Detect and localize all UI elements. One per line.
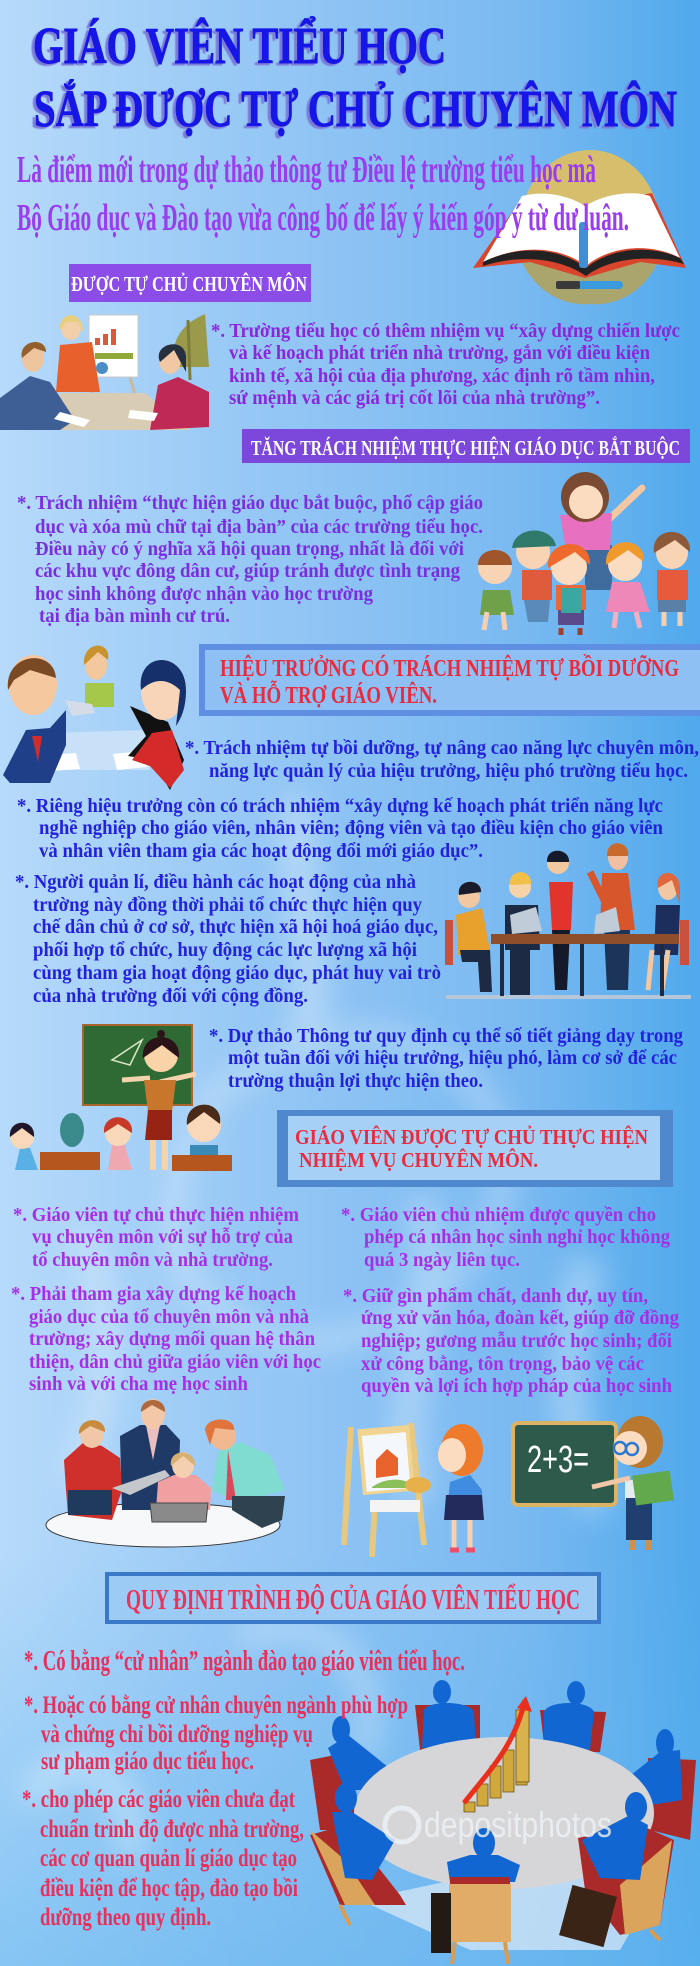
paragraph: thực hiện giáo dục bắt buộc: Điều này có ý nghĩa xã hội quan trọng, nhất là đối với (35, 538, 464, 560)
paragraph: xây dựng kế hoạch giáo dục: sinh và với cha mẹ học sinh (29, 1373, 248, 1395)
paragraph: giáo viên chủ nhiệm: phép cá nhân học sinh nghỉ học không (364, 1226, 670, 1248)
paragraph: nhiệm vụ chiến lược: và kế hoạch phát triển nhà trường, gắn với điều kiện (229, 342, 650, 364)
paragraph: điều kiện học tập: các cơ quan quản lí giáo dục tạo (40, 1845, 297, 1872)
heading: giáo viên được tự chủ: NHIỆM VỤ CHUYÊN MÔN. (299, 1148, 538, 1172)
paragraph: thực hiện giáo dục bắt buộc: các khu vực đông dân cư, giúp tránh được tình trạng (35, 560, 460, 582)
paragraph: người quản lí: chế dân chủ ở cơ sở, thực hiện xã hội hoá giáo dục, (33, 916, 438, 938)
paragraph: chứng chỉ bồi dưỡng (24, 1692, 408, 1775)
paragraph: giáo viên tự chủ: *. Giáo viên tự chủ thực hiện nhiệm (13, 1204, 299, 1226)
paragraph: kế hoạch phát triển năng lực: và nhân viên tham gia các hoạt động đổi mới giáo dục”. (39, 840, 483, 862)
paragraph: thực hiện giáo dục bắt buộc: dục và xóa mù chữ tại địa bàn” của các trường tiểu học. (35, 516, 483, 538)
title: GIÁO VIÊN TIỂU HỌC (33, 16, 446, 75)
paragraph: giáo viên tự chủ: tổ chuyên môn và nhà trường. (32, 1249, 273, 1271)
paragraph: số tiết giảng dạy: *. Dự thảo Thông tư quy định cụ thể số tiết giảng dạy trong (209, 1025, 683, 1047)
illustration: teacher with pupils (478, 472, 690, 635)
paragraph: kế hoạch phát triển năng lực (17, 795, 663, 862)
paragraph: xây dựng kế hoạch giáo dục: trường; xây dựng mối quan hệ thân (29, 1328, 315, 1350)
paragraph: xây dựng kế hoạch giáo dục: thiện, dân chủ giữa giáo viên với học (29, 1351, 321, 1373)
paragraph: người quản lí: trường này đồng thời phải tổ chức thực hiện quy (33, 894, 422, 916)
pupils (478, 530, 690, 635)
paragraph: điều kiện học tập: chuẩn trình độ được nhà trường, (40, 1816, 304, 1843)
heading: được tự chủ chuyên môn (69, 264, 311, 302)
illustration: cartoon managers (3, 646, 186, 790)
paragraph: người quản lí: *. Người quản lí, điều hành các hoạt động của nhà (15, 871, 416, 893)
paragraph: điều kiện học tập (22, 1786, 304, 1931)
paragraph: thực hiện giáo dục bắt buộc: học sinh không được nhận vào học trường (35, 583, 373, 605)
paragraph: giáo viên tự chủ (13, 1204, 299, 1271)
illustration: team at desk (445, 843, 691, 999)
watermark: depositphotos (424, 1804, 612, 1845)
paragraph: thực hiện giáo dục bắt buộc: *. Trách nhiệm “thực hiện giáo dục bắt buộc, phổ cập giáo (17, 492, 483, 514)
paragraph: kế hoạch phát triển năng lực: *. Riêng hiệu trưởng còn có trách nhiệm “xây dựng kế hoạch phát triển năng lực (17, 795, 663, 817)
paragraph: điều kiện học tập: *. cho phép các giáo viên chưa đạt (22, 1786, 296, 1813)
paragraph: điều kiện học tập: điều kiện để học tập, đào tạo bồi (40, 1875, 298, 1902)
illustration: teacher at chalkboard with children (10, 1025, 232, 1171)
illustration: office meeting (0, 314, 209, 430)
subtitle (17, 149, 629, 239)
paragraph: xây dựng kế hoạch giáo dục (11, 1283, 321, 1395)
paragraph: giữ gìn phẩm chất (343, 1285, 679, 1397)
bar chart with rising arrow (464, 1696, 532, 1812)
paragraph: giữ gìn phẩm chất: xử công bằng, tôn trọng, bảo vệ các (361, 1353, 644, 1375)
heading: quy định trình độ (107, 1574, 599, 1622)
illustration: round table business meeting (310, 1680, 696, 1964)
heading: giáo viên được tự chủ (277, 1110, 673, 1187)
paragraph: tự bồi dưỡng (185, 737, 699, 782)
heading: hiệu trưởng: VÀ HỖ TRỢ GIÁO VIÊN. (220, 681, 437, 709)
icon: open book (473, 150, 686, 304)
heading: được tự chủ chuyên môn: ĐƯỢC TỰ CHỦ CHUYÊN MÔN (71, 272, 307, 296)
paragraph: điều kiện học tập: dưỡng theo quy định. (40, 1904, 211, 1931)
paragraph: số tiết giảng dạy: một tuần đối với hiệu trưởng, hiệu phó, làm cơ sở để các (228, 1047, 677, 1069)
heading: giáo viên được tự chủ: GIÁO VIÊN ĐƯỢC TỰ CHỦ THỰC HIỆN (295, 1125, 648, 1149)
illustration: children painting and at blackboard: 2+3= (527, 1439, 589, 1481)
paragraph: giữ gìn phẩm chất: *. Giữ gìn phẩm chất, danh dự, uy tín, (343, 1285, 648, 1307)
paragraph: kế hoạch phát triển năng lực: nghề nghiệp cho giáo viên, nhân viên; động viên và tạo điều kiện cho giáo viên (39, 817, 663, 839)
paragraph: giữ gìn phẩm chất: ứng xử văn hóa, đoàn kết, giúp đỡ đồng (361, 1307, 679, 1329)
heading: hiệu trưởng (199, 644, 700, 716)
paragraph: xây dựng kế hoạch giáo dục: giáo dục của tổ chuyên môn và nhà (29, 1306, 309, 1328)
paragraph: người quản lí: cùng tham gia hoạt động giáo dục, phát huy vai trò (33, 962, 441, 984)
paragraph: giữ gìn phẩm chất: nghiệp; gương mẫu trước học sinh; đối (361, 1330, 672, 1352)
paragraph: thực hiện giáo dục bắt buộc (17, 492, 483, 627)
illustration: children painting and at blackboard (344, 1416, 674, 1557)
paragraph: giáo viên chủ nhiệm: *. Giáo viên chủ nhiệm được quyền cho (341, 1204, 656, 1226)
paragraph: chứng chỉ bồi dưỡng: và chứng chỉ bồi dưỡng nghiệp vụ (41, 1721, 313, 1748)
paragraph: nhiệm vụ chiến lược: *. Trường tiểu học có thêm nhiệm vụ “xây dựng chiến lược (211, 320, 680, 342)
paragraph: chứng chỉ bồi dưỡng: sư phạm giáo dục tiểu học. (41, 1748, 254, 1775)
paragraph: giữ gìn phẩm chất: quyền và lợi ích hợp pháp của học sinh (361, 1375, 672, 1397)
paragraph: xây dựng kế hoạch giáo dục: *. Phải tham gia xây dựng kế hoạch (11, 1283, 296, 1305)
paragraph: cử nhân: *. Có bằng “cử nhân” ngành đào tạo giáo viên tiểu học. (24, 1646, 465, 1677)
paragraph: nhiệm vụ chiến lược: sứ mệnh và các giá trị cốt lõi của nhà trường”. (229, 387, 600, 409)
paragraph: số tiết giảng dạy (209, 1025, 683, 1092)
paragraph: nhiệm vụ chiến lược (211, 320, 680, 409)
paragraph: giáo viên chủ nhiệm: quá 3 ngày liên tục. (364, 1249, 520, 1271)
illustration: colleagues around laptop (46, 1399, 285, 1547)
paragraph: số tiết giảng dạy: trường thuận lợi thực hiện theo. (228, 1070, 483, 1092)
paragraph: người quản lí: phối hợp tổ chức, huy động các lực lượng xã hội (33, 939, 417, 961)
title (33, 16, 677, 138)
paragraph: chứng chỉ bồi dưỡng: *. Hoặc có bằng cử nhân chuyên ngành phù hợp (24, 1692, 408, 1719)
paragraph: nhiệm vụ chiến lược: kinh tế, xã hội của địa phương, xác định rõ tầm nhìn, (229, 365, 655, 387)
heading: tăng trách nhiệm (242, 429, 690, 463)
paragraph: giáo viên tự chủ: vụ chuyên môn với sự hỗ trợ của (32, 1226, 293, 1248)
paragraph: người quản lí: của nhà trường đối với cộng đồng. (33, 985, 308, 1007)
paragraph: thực hiện giáo dục bắt buộc: tại địa bàn mình cư trú. (39, 605, 230, 627)
paragraph: người quản lí (15, 871, 441, 1007)
paragraph: giáo viên chủ nhiệm (341, 1204, 670, 1271)
